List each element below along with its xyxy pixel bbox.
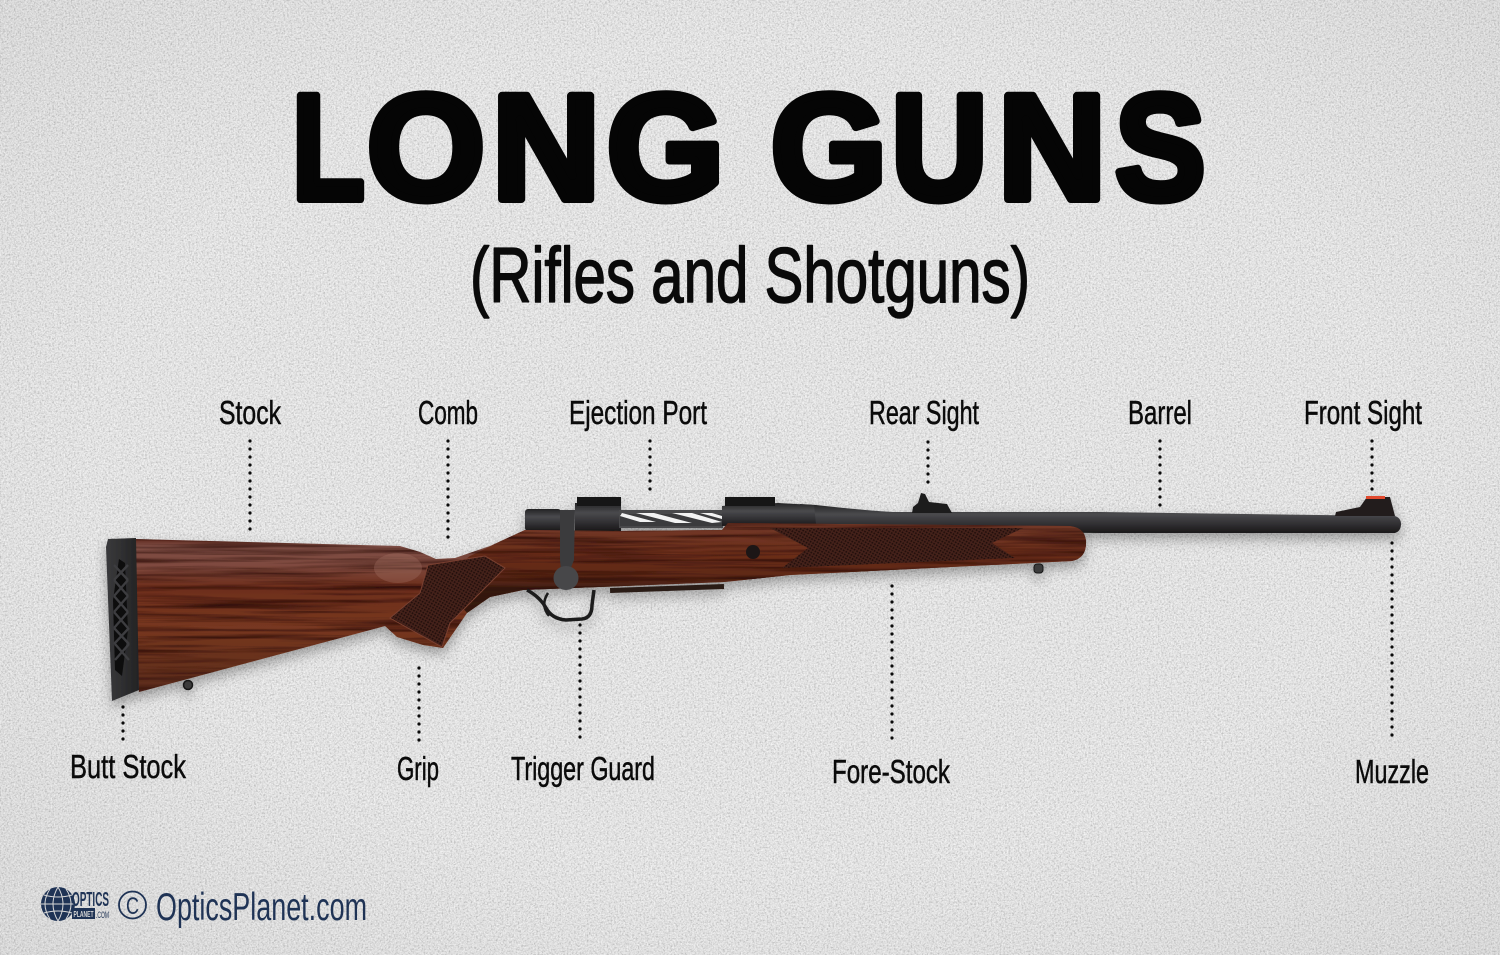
label: Butt Stock [70,707,186,785]
label: Ejection Port: Ejection Port [569,394,707,431]
icon: globe logo [41,887,75,921]
title: G [771,63,887,231]
trigger guard [527,590,594,620]
label: Front Sight: Front Sight [1304,394,1422,431]
title: L [292,63,365,231]
copyright symbol: C [126,893,139,920]
footer: OpticsPlanet logo and copyright: OPTICS [72,889,109,911]
fore-stock and action wood [440,523,1086,613]
label: Grip [397,668,439,787]
rear sight [912,493,952,513]
title: S [1115,63,1206,231]
grip checkering [390,556,505,647]
title: G [607,63,724,231]
label: Barrel [1128,394,1192,507]
label: Stock: Stock [219,394,281,431]
title: O [367,63,485,231]
barrel [800,504,1401,533]
fore-stock swivel stud [1034,564,1043,573]
label: Rear Sight: Rear Sight [869,394,979,431]
logo wordmark [72,889,109,920]
title: N [998,63,1106,231]
recoil pad [106,538,139,701]
site name: OpticsPlanet.com [156,886,367,929]
bolt handle [554,510,578,590]
label: Butt Stock: Butt Stock [70,748,186,785]
footer: OpticsPlanet logo and copyright [41,886,367,929]
copyright symbol [119,892,146,920]
receiver [525,497,816,531]
fore-stock checkering [770,528,1023,568]
butt stock wood [134,523,1086,692]
label: Barrel: Barrel [1128,394,1192,431]
label: Rear Sight [869,394,979,487]
magazine floor plate [610,584,724,593]
label: Front Sight [1304,394,1422,490]
label: Comb: Comb [418,394,478,431]
stock screw [746,545,760,559]
logo wordmark: .COM [96,910,109,920]
label: Stock [219,394,281,530]
logo wordmark: PLANET [74,910,94,919]
comb highlight [374,553,422,583]
label: Trigger Guard: Trigger Guard [511,750,655,787]
label: Grip: Grip [397,750,439,787]
stock swivel stud [184,680,192,690]
rifle illustration [106,493,1401,701]
title: U [891,63,988,231]
ejection port with fluted bolt [620,513,722,526]
front sight [1335,496,1395,516]
label: Ejection Port [569,394,707,490]
label: Fore-Stock: Fore-Stock [832,753,950,790]
title: N [492,63,600,231]
label: Muzzle: Muzzle [1355,753,1429,790]
subtitle: (Rifles and Shotguns) [470,231,1030,319]
